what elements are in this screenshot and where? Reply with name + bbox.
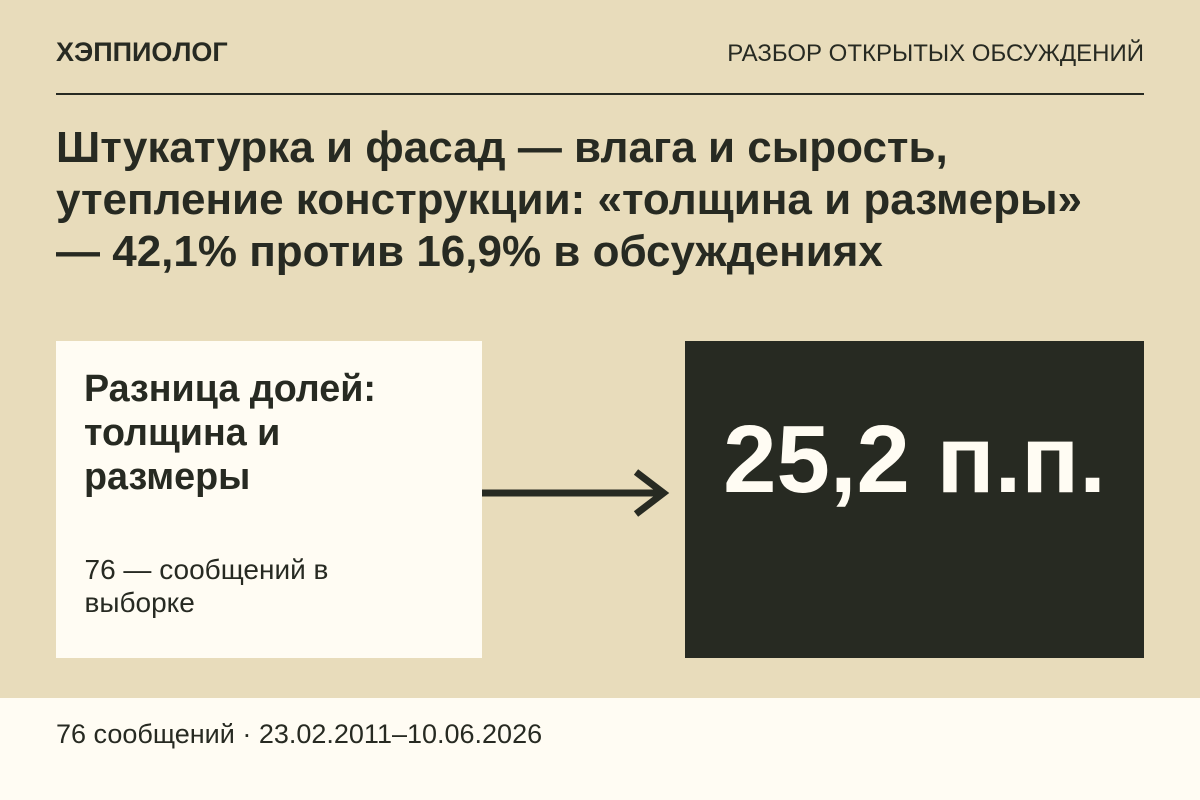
header rule bbox=[56, 93, 1144, 95]
brand heading: ХЭППИОЛОГ bbox=[56, 37, 228, 67]
panel: metric description bbox=[56, 341, 482, 658]
title: Штукатурка и фасад — влага и сырость, bbox=[56, 123, 948, 172]
result number: 25,2 п.п. bbox=[723, 406, 1106, 513]
arrow bbox=[482, 469, 670, 517]
sample size note: 76 — сообщений в bbox=[84, 554, 328, 585]
sample size note: выборке bbox=[84, 587, 195, 618]
section label: РАЗБОР ОТКРЫТЫХ ОБСУЖДЕНИЙ bbox=[727, 40, 1144, 67]
title: утепление конструкции: «толщина и размеры» bbox=[56, 175, 1082, 224]
footer band bbox=[0, 698, 1200, 800]
title: — 42,1% против 16,9% в обсуждениях bbox=[56, 227, 883, 276]
panel: result value bbox=[685, 341, 1144, 658]
panel heading: размеры bbox=[84, 455, 250, 497]
title bbox=[56, 123, 1082, 276]
panel heading: толщина и bbox=[84, 411, 280, 453]
panel heading bbox=[84, 367, 376, 497]
footer text: 76 сообщений · 23.02.2011–10.06.2026 bbox=[56, 719, 542, 749]
sample size note bbox=[84, 554, 328, 618]
panel heading: Разница долей: bbox=[84, 367, 376, 409]
